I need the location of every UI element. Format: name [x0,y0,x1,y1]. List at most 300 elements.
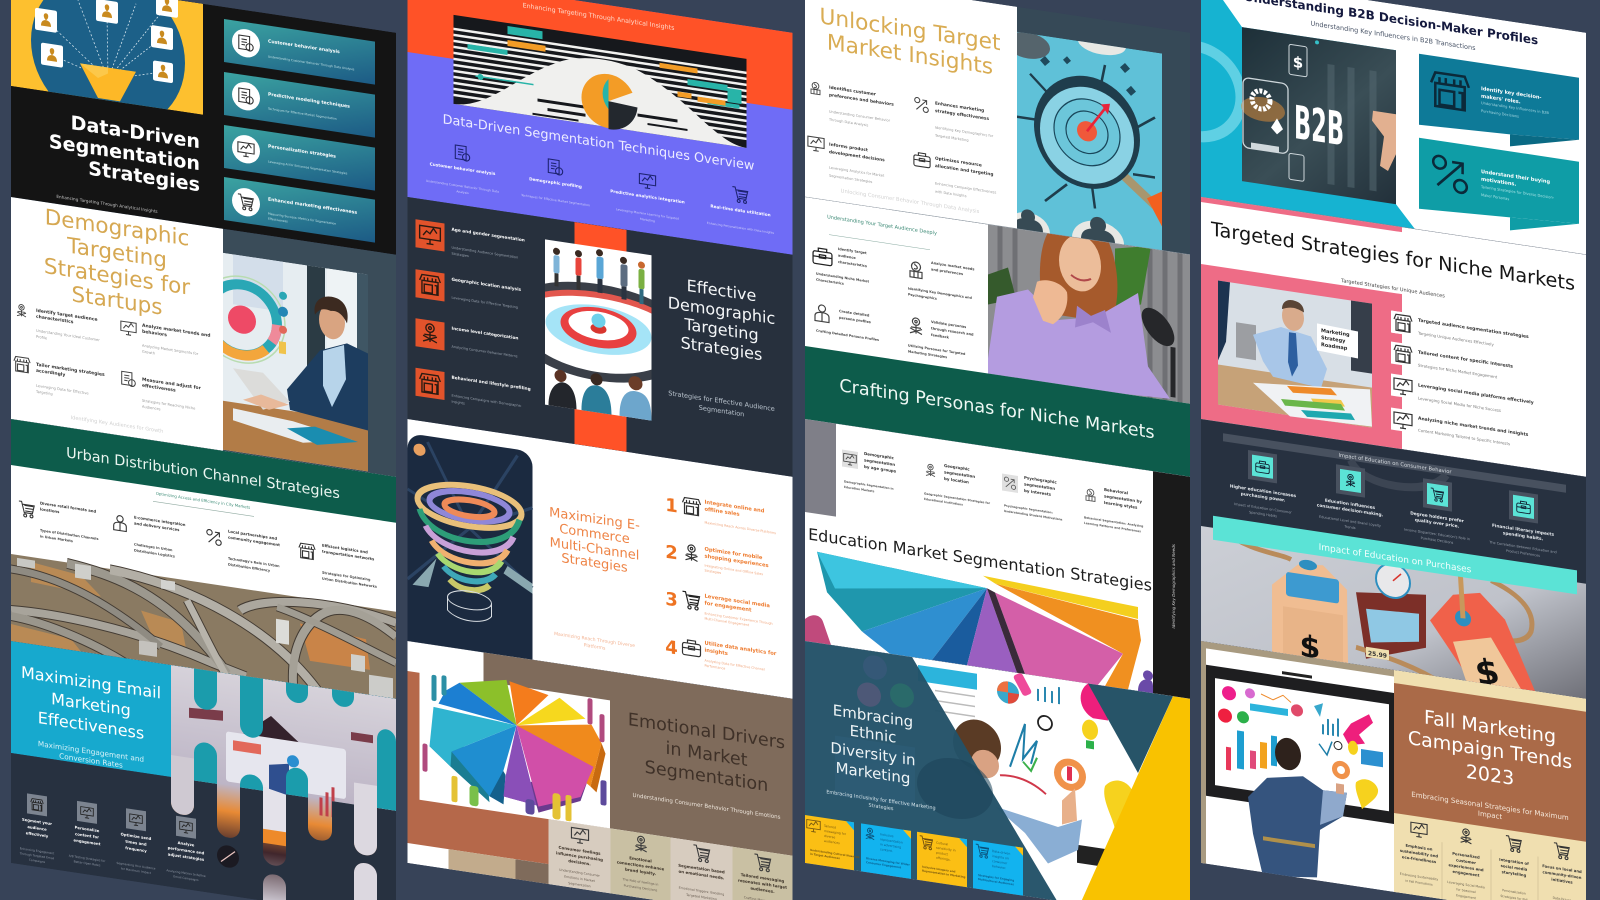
item: measure and adjust: effectiveness [142,383,176,394]
image: price tags and scale [1221,529,1535,702]
image: man at display [1206,660,1394,896]
card: decision-makers: Purchasing Decisions [1481,109,1519,119]
image: target and audience [545,239,652,421]
item: quality over price: quality over price. [1415,517,1459,530]
subtitle: Optimizing Access and Efficiency in City Markets [156,491,250,510]
title: Emotional Drivers [628,710,785,754]
item: financial literacy: spending habits. [1503,530,1544,542]
item: local initiatives [1542,841,1582,900]
green band title [805,346,1190,477]
title: Embracing [833,701,913,731]
item: personalized experiences: customer [1456,857,1476,865]
panel: urban distribution [11,419,396,717]
item: niche trends: Content Marketing Tailored to Specific Interests [1418,428,1510,446]
item: behavioral and lifestyle [416,368,531,415]
item: financial literacy: Product Preferences [1506,549,1540,558]
title: Ethnic [850,722,896,747]
item 2: Integrating Online and Offline Sales [704,564,763,576]
item: resource allocation: with Data Insights [935,190,967,198]
item: tailor strategies [14,356,104,396]
subtitle: Strategies for Effective Audience [668,389,775,413]
item: identify audience: characteristics [36,314,74,325]
item: e-commerce: Distribution Logistics [134,548,175,559]
item: location: by location [944,476,969,485]
item: location: Geographic [944,463,970,472]
image: magnifier on target [1006,18,1162,271]
item: marketing effectiveness [915,97,994,146]
card 1: influence purchasing [556,850,603,862]
item: product development: Leveraging Analytics for Market [829,166,885,178]
footer text: Unlocking Consumer Behavior Through Data Analysis [841,188,980,215]
title: Startups [72,282,162,321]
item: segment audience: Campaigns [29,858,46,864]
image: price tags and scale: $ [1300,629,1320,667]
panel: fall marketing campaign trends [1201,641,1586,900]
item 2: 2 [665,542,678,565]
item: financial literacy [1488,487,1557,560]
card: predictive modeling [224,72,375,138]
photo: woman with microphone [985,214,1190,410]
title: Multi-Channel [550,535,639,564]
item: target audience: Characteristics [816,278,844,286]
item: real-time data: Real-time data utilization [710,203,771,217]
overlay: faint shapes [835,650,993,824]
item: optimize send times: times and [125,839,147,847]
item: age and gender [416,219,525,267]
item: marketing effectiveness: Enhances marketing [935,101,984,114]
item: local initiatives: Focus on local and [1542,863,1582,874]
item: interests: Psychographic Segmentation: [1004,503,1053,515]
item: optimize send times: frequency [125,845,147,853]
item: predictive analytics: Marketing [640,217,655,223]
title: Effective [687,276,756,305]
item: purchasing power: Impact of Education on Consumer [1234,502,1292,515]
item: market needs: Psychographics [908,292,937,301]
item: measure and adjust [121,370,201,410]
panel: embracing ethnic diversity [805,640,1190,900]
item: segment audience: audience [27,824,47,832]
item: validate personas: feedback [931,333,950,340]
card: cultural sensitivity: sensitivity in [936,846,956,853]
item: persona profiles: Create detailed [839,309,870,318]
item 1: Maximizing Reach Across Diverse Platforms [704,521,776,535]
item 3 [665,588,773,631]
item 1: Integrate online and [704,500,765,515]
card 4 [732,847,792,900]
title: Targeting [66,233,167,273]
item: learning styles: segmentation by [1104,493,1142,504]
item: learning styles [1084,484,1143,534]
item: analyze market [120,320,210,355]
item: personalize content [69,800,106,868]
item: validate personas: Marketing Strategies [908,349,947,359]
card 1: Segmentation [568,881,591,888]
card: personalization [224,125,375,191]
card: data-driven insights: Multicultural Audiences [978,877,1014,886]
heading: Targeted Strategies for Niche Markets [1210,217,1575,295]
item: product development [808,136,885,186]
item: analyze performance: performance and [168,845,205,856]
image: man drawing on whiteboard [918,657,1134,876]
item: segment audience: Enhancing Engagement [20,846,55,856]
card: buying motivations: motivations. [1481,177,1516,188]
item: preferences: Understanding Consumer Behavior [829,110,891,123]
item: analyze market: Analyzing Market Segments for [142,344,199,356]
card: buying motivations: Understand their buying [1481,169,1550,185]
card 4: audiences. [750,885,775,894]
item: location [924,460,991,511]
item: personalized experiences: experiences and [1448,862,1484,872]
column 3 [805,0,1190,900]
panel: effective demographic targeting [408,197,792,477]
panel: data-driven techniques overview [408,0,792,255]
item: quality over price: Purchase Decisions [1421,536,1454,545]
title: Segmentation [645,758,768,796]
item: preferences: Through Data Analysis [828,117,868,128]
item: measure and adjust: Measure and adjust for [142,377,202,392]
item: decision-making: Educational Level and Brand Loyalty [1319,515,1381,528]
header bar: Impact of Education on Consumer Behavior [1338,453,1452,476]
item 4: insights [704,648,728,657]
item: persona profiles: Crafting Detailed Persona Profiles [816,329,879,342]
item: age and gender: Age and gender segmentation [452,227,525,244]
card: inclusive representation: Diverse Messaging for Wider [866,856,910,867]
item 2 [665,541,769,582]
item: sustainability: eco-friendliness [1402,854,1437,864]
title: 2023 [1466,760,1514,790]
item: interests: by interests [1024,488,1052,497]
item: decision-making: Education influences [1325,498,1376,511]
item: decision-making: Trends [1343,524,1356,530]
item: learning styles: Learning Patterns and Preferences [1084,521,1141,533]
item: financial literacy: Financial literacy impacts [1492,523,1554,538]
decorative ring [1151,40,1241,143]
item: measure and adjust: Strategies for Reaching Niche [142,399,196,411]
item: personalize content: content for [75,831,99,840]
subtitle: Understanding Consumer Behavior Through Emotions [633,793,781,821]
item: interests [1002,472,1063,522]
item 4: Performance [704,664,725,671]
title: Maximizing E- [549,505,640,534]
card 2: brand loyalty. [625,867,656,876]
card 2: connections enhance [617,859,665,872]
item: analyze performance: Analyzing Metrics to Refine [166,868,206,878]
sidebar [1153,471,1190,699]
item: target audience: Identify target [838,247,867,255]
card: decision-makers: Identify key decision- [1481,86,1542,101]
green band title: Crafting Personas for Niche Markets [839,376,1155,443]
item: e-commerce: E-commerce integration [134,514,186,527]
item: sustainability: Emphasis on [1406,843,1433,852]
card 2: Purchasing Decisions [624,883,658,893]
panel: e-commerce multi-channel [408,419,792,701]
card: inclusive representation: representation [880,837,903,845]
card: customer behavior: Customer behavior analysis [268,39,340,55]
item: purchasing power: Spending Habits [1249,510,1277,518]
item: tailor strategies: Tailor marketing strategies [36,362,105,378]
title: Maximizing Email [21,663,161,702]
card: inclusive representation [861,823,911,879]
photo: man with roadmap: Roadmap [1321,342,1348,352]
card: tailored messaging: Understanding Cultural Nuances [810,848,860,859]
item: analyze performance [166,814,206,883]
card: tailored messaging [805,815,860,871]
item: age groups: Education Markets [844,485,875,493]
image: b2b [1241,27,1396,204]
card: data-driven insights: behavior. [992,864,1006,870]
illustration: audience funnel [11,0,203,115]
item: optimize send times: for Maximum Impact [121,867,152,875]
item: partnerships: community engagement [228,535,280,547]
item: analyze performance: Analyze [178,840,195,848]
card: data-driven insights: Strategies for Engaging [978,873,1014,882]
card: tailored messaging: diverse [824,834,835,840]
card: marketing effectiveness [224,177,375,243]
title: Diversity in [830,739,916,770]
item: age groups: segmentation [864,457,895,467]
item 1: 1 [665,495,678,518]
item: niche trends: Analyzing niche market trends and insights [1418,416,1529,438]
subtitle [153,490,254,516]
item 4: 4 [665,637,678,660]
image: price tags and scale: $ [1472,652,1503,694]
item: market needs: and preferences [931,267,963,276]
item: social storytelling: social media [1501,863,1528,872]
item: segment audience [19,792,55,866]
card: tailored messaging: Tailored [823,824,836,830]
title: Strategies [88,157,200,196]
item: personalized experiences: Personalized [1452,851,1480,860]
subheading: Targeted Strategies for Unique Audiences [1340,278,1445,300]
item: personalized experiences [1447,826,1485,900]
item: interests: segmentation [1024,481,1055,491]
card: inclusive representation: in advertising [880,842,901,849]
item: partnerships: Local partnerships and [228,529,277,541]
image: pie chart with people [420,667,610,828]
item: validate personas: Validate personas [931,320,966,329]
item: age and gender: Strategies [452,252,469,258]
card: cultural sensitivity: Cultural [936,841,948,846]
item: analyze performance: adjust strategies [168,852,205,862]
subtitle: Segmentation [699,404,744,419]
card: predictive modeling: Predictive modeling techniques [268,92,350,110]
subtitle: Impact [1478,809,1502,821]
cyan backdrop [1201,0,1415,229]
item: decision-making: consumer decision-making. [1317,502,1384,518]
item: target audience: audience [838,253,856,260]
card: decision-makers: makers' roles. [1481,94,1521,105]
item: validate personas: Utilizing Personas for Targeted [908,343,966,356]
item: resource allocation: Optimizes resource [935,156,982,169]
item: interests: Understanding Student Motivations [1004,509,1063,522]
item: learning styles: Behavioral [1104,487,1129,496]
item: logistics: Urban Distribution Networks [322,577,377,589]
item: logistics [299,539,377,589]
item 1 [665,494,776,535]
card 1 [548,819,610,893]
card 2: Emotional [629,855,652,864]
item: geographic location [416,269,522,313]
panel: crafting personas [805,187,1190,477]
item: income level: Analyzing Consumer Behavior Patterns [452,345,518,359]
overlay: top right triangle [1088,683,1173,778]
card: cultural sensitivity: offerings. [936,856,951,862]
title band [11,419,396,523]
sidebar: Identifying Key Demographics and Needs [1171,544,1176,629]
title: Education Market Segmentation Strategies [808,525,1152,595]
card: customer behavior: Understanding Customer Behavior Through Data Analysis [268,55,355,72]
item: tailor strategies: accordingly [36,368,65,378]
subtitle [827,214,937,251]
item: e-commerce [113,515,186,558]
panel: demographic targeting for startups [11,197,396,477]
item: financial literacy: The Correlation Between Education and [1488,540,1557,554]
card 2: The Role of Feelings in [622,877,658,887]
item: retail formats: Types of Distribution Channels [40,528,98,541]
subtitle: Embracing Inclusivity for Effective Marketing [826,789,936,812]
title: Strategies for [44,254,190,301]
item: social storytelling [1499,835,1529,900]
title: Segmentation [49,130,200,175]
item 1: offline sales [704,507,740,518]
item: age groups: by age groups [864,464,897,474]
title: Targeting [683,314,759,345]
item: location: Educational Institutions [924,497,963,507]
item: logistics: Efficient logistics and [322,543,368,555]
item 3: for engagement [704,601,752,614]
item: age groups: Demographic Segmentation in [844,479,894,491]
item: optimize send times: Optimize send [121,831,152,841]
title: Marketing [51,689,131,720]
item: product development: development decisions [829,149,885,164]
item: quality over price [1404,475,1470,547]
item: social media: Leveraging Social Media for Niche Success [1418,396,1501,413]
item: audience segmentation: Targeting Unique Audiences Effectively [1417,330,1495,347]
item: tailored content [1394,345,1513,382]
item: social media: Leveraging social media platforms effectively [1418,383,1534,406]
item: resource allocation [914,152,996,203]
item: measure and adjust: Audiences [142,405,161,411]
item: target audience: Understanding Niche Market [816,272,869,284]
teal pills [194,668,396,811]
card: buying motivations: Maker Personas [1481,193,1509,201]
item: audience segmentation: Targeted audience segmentation strategies [1418,318,1529,340]
card: marketing effectiveness: Effectiveness [268,217,288,224]
card 1: decisions. [568,858,591,867]
dark header region [1201,419,1586,584]
item: market needs: Identifying Key Demographics and [908,286,972,300]
item: retail formats: locations [40,506,60,514]
item: tailor strategies: Leveraging Data for Effective [36,384,89,396]
item: purchasing power: purchasing power. [1241,491,1286,504]
item: personalized experiences: Leveraging Social Media [1447,880,1485,890]
item: personalize content: A/B Testing Strategies for [69,854,106,863]
item: age groups: Demographic [864,451,895,460]
item: age and gender: Understanding Audience Segmentation [452,246,518,260]
item: real-time data: Enhancing Personalization with Data Insights [707,221,775,235]
panel: maximizing email marketing [11,641,396,900]
item 3: 3 [665,589,678,612]
item: purchasing power: Higher education increases [1230,483,1297,499]
card: marketing effectiveness: Enhanced marketing effectiveness [268,197,357,216]
item: optimize send times [117,807,156,876]
card: predictive modeling: Techniques for Effective Market Segmentation [267,106,337,121]
item: persona profiles: persona profiles [839,316,871,324]
item: age groups [842,448,897,497]
card 1: Emotions in Market [564,875,596,883]
item: analyze market: Analyze market trends and [142,323,210,339]
title: Unlocking Target [820,4,1001,56]
item: partnerships: Technology's Role in Urban [228,557,280,568]
item: persona profiles [815,304,879,342]
item: behavioral and lifestyle: Enhancing Campaigns with Demographic [452,394,522,408]
item: analyze performance: Email Campaigns [173,874,199,882]
title: Fall Marketing [1424,706,1556,748]
image: email dashboard in pill masks [171,665,396,900]
item: identify audience [16,304,100,342]
card: decision-makers: Understanding Key Influencers in B2B [1481,101,1549,115]
image: price tags and scale: 25.99 [1368,650,1387,660]
title: Data-Driven Segmentation Techniques Overview [443,112,755,174]
item 2: Optimize for mobile [704,547,763,561]
card 3: on emotional needs. [679,869,725,881]
accent strip [1201,197,1402,232]
card 3: Segmentation based [678,863,725,875]
card: personalization: Personalization strategies [268,144,336,160]
item 2: Strategies [704,569,722,575]
item: tailored content: Strategies for Niche Market Engagement [1418,363,1498,379]
subtitle: Maximizing Reach Through Diverse [554,631,635,649]
image: b2b: $ [1293,53,1303,72]
card: data-driven insights [973,840,1023,896]
banner [1213,516,1577,594]
overlay: dark diagonal [805,641,1057,900]
panel: b2b decision-maker profiles [1151,0,1586,255]
item: predictive analytics [610,169,685,228]
item: predictive analytics: Leveraging Machine Learning for Targeted [616,207,679,221]
subtitle: Platforms [584,642,606,652]
item: customer behavior: Analysis [456,189,469,195]
card: tailored messaging: in Target Audiences [810,852,840,860]
card: data-driven insights: consumer [992,859,1008,865]
item 4 [665,635,777,678]
item: sustainability: sustainability and [1400,848,1438,859]
item: retail formats [18,500,98,542]
card: cultural sensitivity [917,832,967,887]
card 3 [670,837,732,900]
item: decision-making [1317,461,1384,534]
item: social storytelling: storytelling [1502,869,1527,878]
item: product development: Segmentation Strategies [829,174,873,184]
item: identify audience: Understanding Your Ideal Customer [36,329,100,342]
item: personalized experiences: for Seasonal [1456,887,1476,894]
subtitle: Enhancing Targeting Through Analytical Insights [523,2,674,32]
item 3: Multi-Channel Engagement [704,617,750,627]
title: Strategies [681,333,762,364]
item: preferences: preferences and behaviors [829,92,894,108]
item 4: Analyzing Data for Effective Channel [704,659,765,672]
item: social media [1394,378,1534,418]
item: local initiatives: community-driven [1543,869,1582,880]
item: segment audience: Through Targeted Email [19,851,54,861]
item: target audience: characteristics [838,260,867,268]
item: demographic profiling [520,155,590,207]
panel: emotional drivers [408,641,792,900]
column 1 [11,0,396,900]
card 3: Emotional Triggers: Boosting [679,886,724,897]
subheading: Understanding Key Influencers in B2B Transactions [1310,19,1476,52]
panel: data-driven segmentation strategies [11,0,396,255]
